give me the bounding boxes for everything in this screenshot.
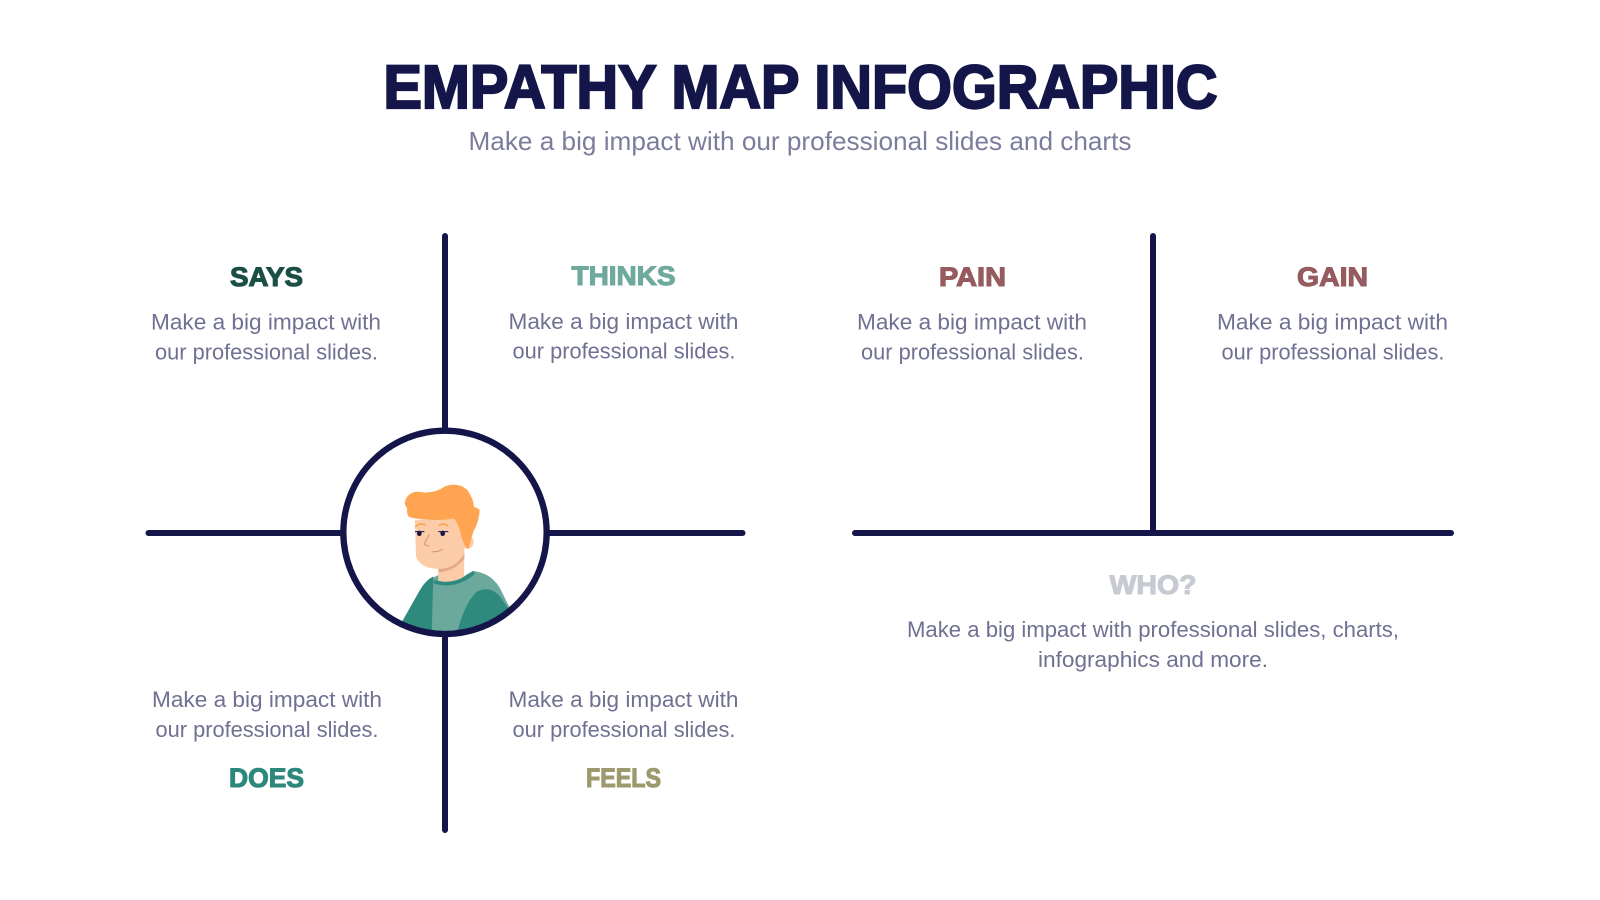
panel: empathy quadrant diagram [146,233,746,833]
feels block: Make a big impact with [508,687,738,712]
does block: our professional slides. [156,717,378,742]
pain block: our professional slides. [861,340,1084,364]
avatar portrait [343,431,547,635]
who block [907,570,1399,672]
thinks block [508,261,738,364]
hair [405,485,480,549]
thinks block: our professional slides. [512,338,736,364]
shirt [402,571,510,631]
thinks block: THINKS [572,261,676,291]
feels block: FEELS [586,763,661,793]
face [415,517,464,569]
gain block: Make a big impact with [1217,310,1448,334]
says block: SAYS [230,262,303,292]
says block: our professional slides. [155,340,378,364]
gain block: our professional slides. [1222,340,1444,364]
thinks block: Make a big impact with [508,309,738,334]
does block: Make a big impact with [152,687,382,712]
gain block [1217,262,1448,364]
does block: DOES [229,763,304,793]
who block: Make a big impact with professional slides, charts, [907,617,1399,642]
says block [151,262,381,364]
pain block: Make a big impact with [857,310,1087,334]
ring [343,431,547,634]
ear [462,538,474,549]
pain block [857,262,1087,364]
feels block [508,687,738,793]
pain block: PAIN [939,262,1006,292]
neck [438,547,464,586]
gain block: GAIN [1297,262,1368,292]
does block [152,687,382,793]
feels block: our professional slides. [512,717,736,742]
title: EMPATHY MAP INFOGRAPHIC [384,53,1218,121]
t-shaped divider [852,233,1454,536]
who block: infographics and more. [1038,647,1268,672]
eyes [415,531,448,532]
subtitle: Make a big impact with our professional slides and charts [468,126,1132,156]
panel: pain gain who diagram [852,233,1454,672]
says block: Make a big impact with [151,310,381,334]
cross lines [146,233,746,833]
who block: WHO? [1110,570,1196,600]
brows [415,524,448,527]
nose and smile [424,534,443,552]
